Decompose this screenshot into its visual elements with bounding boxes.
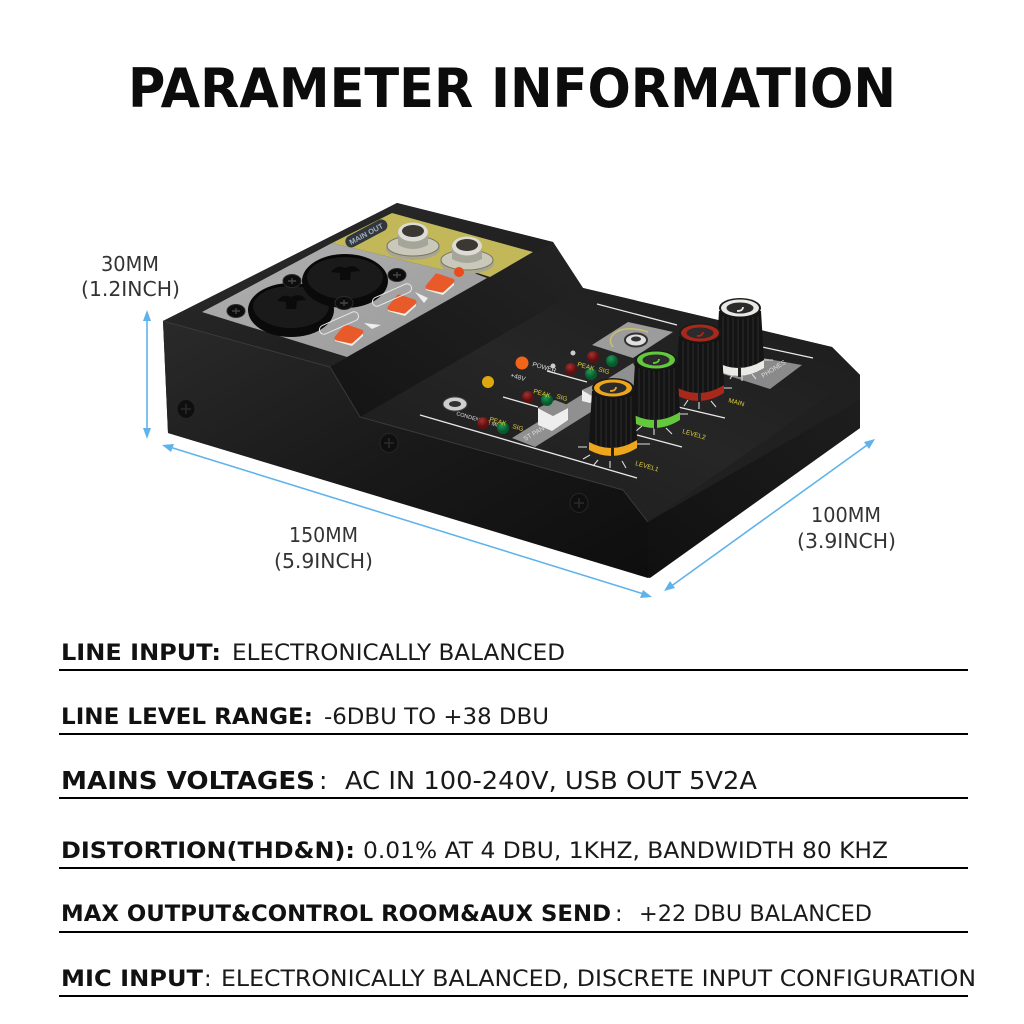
panel labels: SIG [555,393,568,403]
panel labels: MAIN [727,397,745,408]
phones label: PHONES [760,359,788,380]
control surface [360,288,860,522]
LEDs [477,350,618,434]
spec: line level range: LINE LEVEL RANGE: [61,704,313,730]
spec: max output: MAX OUTPUT&CONTROL ROOM&AUX SEND [61,901,611,927]
spec rows [59,640,976,997]
label: height: 30MM [101,252,159,276]
front panel screws [177,400,588,512]
main out LED [454,267,464,277]
output jacks [386,222,494,274]
condenser mic label: CONDENSER MIC [455,411,502,430]
title: PARAMETER INFORMATION [128,57,896,120]
control surface lines [420,304,813,478]
product photo: audio mixer [163,203,860,578]
button labels [318,282,428,336]
knob: green level [632,350,680,429]
label: length: (5.9INCH) [274,549,373,573]
knob: red level [676,323,724,402]
phones panel [720,358,802,389]
spec: mains voltages: : [319,766,327,795]
spec: mains voltages: AC IN 100-240V, USB OUT 5V2A [345,766,757,795]
spec: distortion: 0.01% AT 4 DBU, 1KHZ, BANDWIDTH 80 KHZ [363,838,888,864]
label: length [274,523,373,573]
main out label [343,217,389,250]
slider cap 2 [582,384,600,403]
spec: distortion: DISTORTION(THD&N): [61,838,355,864]
panel labels: +48V [509,372,527,383]
right side panel [648,400,860,578]
panel labels: LEVEL2 [681,428,707,442]
right chamfer [648,375,860,522]
raised top face with connectors [163,203,553,367]
spec: max output: +22 DBU BALANCED [639,901,872,927]
spec: max output: : [615,901,623,927]
jack panel [592,322,673,358]
grey input panel [202,243,487,357]
slider cap 1 [538,400,568,431]
combo XLR inputs [248,254,388,337]
spec: mic input [59,966,976,997]
dimension arrow: width [664,439,875,591]
spec: mains voltages: MAINS VOLTAGES [61,766,315,795]
knob: white main/phones [716,298,764,377]
mic jack [443,397,467,411]
panel labels: SIG [597,366,610,376]
knob scale ticks [578,360,773,468]
main out label: MAIN OUT [348,221,385,247]
spec: max output [59,901,968,933]
spec: mic input: ELECTRONICALLY BALANCED, DISCRETE INPUT CONFIGURATION [221,966,976,992]
spec: line input [59,640,968,671]
label: height: (1.2INCH) [81,277,180,301]
panel labels: SIG [511,423,524,433]
dimension arrow: height [143,310,151,439]
yellow main out panel [332,213,533,277]
label: width: (3.9INCH) [797,529,896,553]
spec: mic input: : [204,966,212,992]
panel labels: PEAK [488,416,508,428]
spec: distortion [59,838,968,869]
panel labels [488,361,745,474]
panel labels: LEVEL1 [634,460,660,474]
panel labels: POWER [531,361,557,375]
mixer body silhouette [163,203,860,578]
slider strip [512,363,642,447]
panel screws [227,268,406,318]
spec: line input: LINE INPUT: [61,640,221,666]
spec: line level range: -6DBU TO +38 DBU [324,704,549,730]
panel labels: PEAK [532,388,552,400]
spec: mic input: MIC INPUT [61,966,204,992]
headphone jack arc and socket [610,329,648,347]
front panel [163,321,648,578]
panel labels: PEAK [576,361,596,373]
dimension arrow: length [162,444,652,598]
label: length: 150MM [289,523,358,547]
sloped hump face [330,242,583,417]
orange buttons [335,276,454,346]
panel labels: ST PAN [522,425,546,443]
spec: line level range [59,704,968,735]
spec: mains voltages [59,766,968,799]
label: width: 100MM [811,503,881,527]
label: height [81,252,180,301]
spec: line input: ELECTRONICALLY BALANCED [232,640,565,666]
label: width [797,503,896,553]
knob: orange level [589,378,637,457]
